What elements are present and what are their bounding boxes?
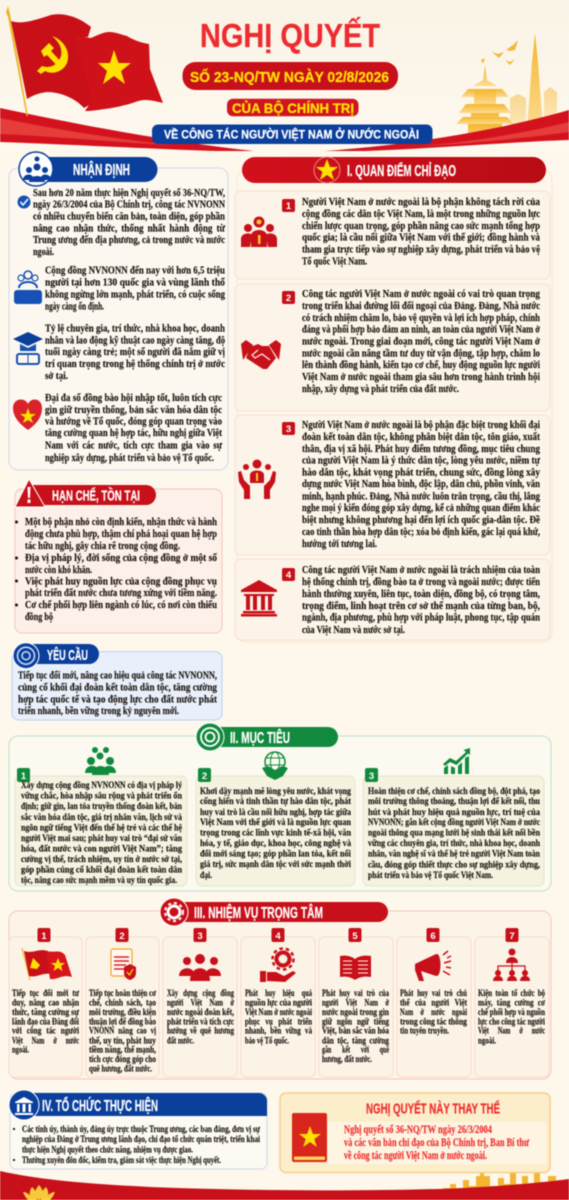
- badge: 2: [119, 931, 125, 942]
- text: thế, uy tín, phát huy: [89, 1035, 156, 1045]
- text: Khơi dậy mạnh mẽ lòng yêu nước, khát vọng: [200, 786, 351, 796]
- text: paragraph 4: và hướng về Tổ quốc, đóng góp quan trọng vào: [45, 416, 222, 428]
- text: vững các chuyên gia, trí thức, nhà khoa học, doanh: [368, 838, 540, 848]
- panel: section IV tổ chức thực hiện: [9, 1090, 267, 1169]
- text: thức, tăng cường sự: [12, 1007, 79, 1017]
- text: implementation: nghiệp của Đảng ở Trung ương lãnh đạo, chỉ đạo tổ chức quán triệt, triển khai: [22, 1134, 260, 1144]
- text: trong công tác thông: [400, 1016, 467, 1026]
- badge 3: [282, 422, 295, 435]
- text: Việt Nam ở nước ngoài: [245, 1007, 312, 1017]
- badge: [198, 768, 211, 782]
- text: paragraph 4: gìn giữ truyền thống, bản sắc văn hóa dân tộc: [45, 404, 222, 416]
- text: [21, 780, 182, 885]
- heading: NGHỊ QUYẾT NÀY THAY THẾ: [366, 1100, 500, 1118]
- issuer pill: CỦA BỘ CHÍNH TRỊ: [232, 101, 354, 116]
- badge 1: 1: [286, 201, 292, 212]
- badge 2: [282, 291, 295, 304]
- text: paragraph 1: Trung ương đến địa phương, cả trong nước và nước: [33, 234, 225, 246]
- icon: document shield: [111, 949, 136, 980]
- badge 1: [282, 199, 295, 212]
- heading: yêu cầu: YÊU CẦU: [47, 646, 88, 664]
- subject pill: [152, 124, 432, 144]
- text: paragraph 4: Nam với các nước, tích cực tham gia vào sự: [45, 440, 222, 452]
- text: cường vị thế, trách nhiệm, uy tín ở nước sở tại,: [21, 854, 182, 864]
- text: requirements: củng cố khối đại đoàn kết toàn dân tộc, tăng cường: [18, 682, 217, 694]
- text: ngoài.: [12, 1045, 29, 1055]
- text: tích cực đóng góp cho: [89, 1054, 156, 1064]
- text: paragraph 3: tuổi ngày càng trẻ; một số người đã nắm giữ vị: [45, 346, 225, 358]
- text: đổi mới sáng tạo; góp phần lan tỏa, kết nối: [200, 848, 351, 858]
- text: paragraph 4: nghiệp xây dựng, phát triển và bảo vệ Tổ quốc.: [45, 452, 214, 464]
- badge: 5: [352, 931, 358, 942]
- text: giá trị, sức mạnh dân tộc với sức mạnh thời: [200, 859, 351, 869]
- heading: hạn chế: [15, 479, 156, 507]
- skyline: [443, 1172, 566, 1197]
- text: viewpoint 2: [302, 288, 541, 395]
- panel: yêu cầu: [12, 643, 222, 720]
- text: paragraph 1: ngoài.: [33, 246, 54, 258]
- task card 2: [86, 928, 159, 1077]
- text: paragraph 3: [45, 322, 225, 382]
- text: viewpoint 4: của Việt Nam và nước sở tại.: [302, 624, 405, 636]
- icon: pagoda and skyline: [456, 33, 557, 144]
- text: replaced documents: về công tác người Việt Nam ở nước ngoài.: [344, 1150, 487, 1162]
- text: limitations: Một bộ phận nhỏ còn định kiến, nhận thức và hành: [25, 516, 217, 528]
- text: implementation: Các tỉnh ủy, thành ủy, đảng ủy trực thuộc Trung ương, các ban đảng, đơn vị sự: [22, 1124, 260, 1134]
- text: paragraph 2: ngày càng ổn định.: [45, 300, 104, 312]
- text: thuận lợi để đồng bào: [89, 1016, 156, 1026]
- text: Tiếp tục đổi mới tư: [12, 988, 79, 998]
- text: Nam ở nước ngoài: [400, 1007, 467, 1017]
- panel: nhận định: [9, 152, 228, 470]
- text: viewpoint 4: [302, 564, 540, 636]
- text: Phát huy vai trò chủ: [400, 988, 467, 998]
- right swoosh: [325, 110, 569, 151]
- text: Việt, bản sắc văn hóa: [322, 1026, 389, 1036]
- text: paragraph 3: Tỷ lệ chuyên gia, trí thức, nhà khoa học, doanh: [45, 322, 225, 334]
- icon: handshake: [241, 340, 281, 369]
- heading: section I: [242, 157, 546, 183]
- text: [245, 988, 312, 1045]
- icon: gear in hand: [260, 948, 296, 982]
- icon: org chart: [493, 948, 530, 981]
- icon: red book: [292, 1113, 327, 1162]
- text: hương, đất nước.: [322, 1054, 372, 1064]
- heading: section I: I. QUAN ĐIỂM CHỈ ĐẠO: [347, 162, 456, 180]
- text: ngoài thông qua mạng lưới hệ sinh thái kết nối bền: [368, 828, 540, 838]
- text: tiềm năng, thế mạnh,: [89, 1045, 156, 1055]
- text: tộc, nâng cao sức mạnh mềm và uy tín quốc gia.: [21, 875, 177, 885]
- text: paragraph 3: sở tại.: [45, 370, 68, 382]
- task card 5: [319, 928, 393, 1077]
- heading: section II: II. MỤC TIÊU: [230, 728, 290, 747]
- inner band: [328, 1122, 546, 1164]
- text: góp phần củng cố khối đại đoàn kết toàn dân: [21, 864, 182, 874]
- text: Việt Nam với thế giới và là nguồn lực quan: [200, 817, 351, 827]
- badge: 4: [275, 931, 281, 942]
- badge 2: 2: [286, 293, 291, 304]
- text: quê hương, đất nước.: [89, 1063, 152, 1073]
- text: đại.: [200, 870, 212, 880]
- heading: section II: [196, 723, 338, 751]
- heading: section IV: [9, 1090, 267, 1120]
- badge: 7: [509, 931, 515, 942]
- text: paragraph 1: ngày 26/3/2004 của Bộ Chính trị, công tác NVNONN: [33, 198, 225, 210]
- icon: flags: [22, 948, 72, 980]
- text: phát triển và bảo vệ Tổ quốc Việt Nam.: [368, 870, 493, 880]
- text: nhân, văn nghệ sĩ và thế hệ trẻ người Việt Nam toàn: [368, 848, 540, 858]
- text: hóa, y tế, giáo dục, khoa học, công nghệ và: [200, 838, 351, 848]
- text: Việt Nam ở nước: [12, 1035, 79, 1045]
- text: nguồn lực của người: [245, 997, 312, 1007]
- icon: lotus: [23, 1185, 55, 1200]
- text: duy, nâng cao nhận: [12, 997, 79, 1007]
- icon: megaphone: [415, 951, 451, 981]
- subject pill: VỀ CÔNG TÁC NGƯỜI VIỆT NAM Ở NƯỚC NGOÀI: [164, 126, 419, 142]
- footer wave: [0, 1171, 569, 1200]
- text: [322, 988, 390, 1064]
- text: limitations: [25, 516, 217, 623]
- text: [167, 988, 235, 1045]
- text: Hoàn thiện cơ chế, chính sách đồng bộ, đột phá, tạo: [368, 786, 540, 796]
- text: đất nước.: [167, 1035, 194, 1045]
- text: Xây dựng cộng đồng NVNONN có địa vị pháp lý: [21, 780, 182, 790]
- goal card 3: [363, 748, 544, 886]
- badge: 1: [21, 771, 27, 782]
- icon: flagpole: [6, 6, 28, 116]
- bullets: [15, 520, 18, 606]
- text: Tiếp tục hoàn thiện cơ: [89, 988, 157, 998]
- text: viewpoint 2: nhập, xây dựng và phát triển của đất nước.: [302, 383, 459, 395]
- text: implementation: thực hiện Nghị quyết theo chức năng, nhiệm vụ được giao.: [22, 1145, 193, 1155]
- text: implementation: Thường xuyên đôn đốc, kiểm tra, giám sát việc thực hiện Nghị quyết.: [22, 1155, 221, 1165]
- text: requirements: Tiếp tục đổi mới, nâng cao hiệu quả công tác NVNONN,: [18, 670, 217, 682]
- text: thể của người Việt: [400, 997, 468, 1007]
- text: môi trường, điều kiện: [89, 1007, 156, 1017]
- text: limitations: tác hữu nghị, gây chia rẽ trong cộng đồng.: [25, 540, 180, 552]
- text: phục vụ phát triển: [245, 1016, 312, 1026]
- text: [478, 988, 546, 1045]
- badge: [272, 928, 284, 942]
- heading: section IV: IV. TỔ CHỨC THỰC HIỆN: [42, 1097, 158, 1115]
- icon: growth chart: [443, 748, 470, 774]
- icon: birds: [481, 40, 518, 65]
- icon: people network: [85, 747, 116, 775]
- icon: check: [18, 196, 30, 208]
- icon: leader group: [241, 216, 277, 247]
- text: người Việt mai sau; phát huy vai trò “đại sứ văn: [21, 833, 182, 843]
- title: NGHỊ QUYẾT: [200, 17, 380, 54]
- badge: [348, 928, 362, 942]
- badge: [17, 768, 30, 782]
- heading: nhận định: [19, 152, 158, 186]
- icon: graduation book: [13, 332, 43, 364]
- text: ngoài.: [478, 1035, 496, 1045]
- card 1: [235, 191, 550, 279]
- badge: [116, 928, 128, 942]
- text: Xây dựng cộng đồng: [167, 988, 234, 998]
- icon: party flag: [11, 14, 94, 108]
- panel: section I quan điểm chỉ đạo: [235, 157, 552, 642]
- card 2: [235, 284, 550, 411]
- text: chế phối hợp và nguồn: [478, 1007, 545, 1017]
- text: sắc văn hóa dân tộc, giá trị nhân văn, lịch sử và: [21, 812, 182, 822]
- heading: section III: III. NHIỆM VỤ TRỌNG TÂM: [194, 903, 323, 922]
- badge: [38, 928, 50, 942]
- text: limitations: Việc phát huy nguồn lực của cộng đồng phục vụ: [25, 576, 217, 588]
- text: cầu, đóng góp thiết thực cho sự nghiệp xây dựng,: [368, 860, 540, 870]
- icon: open book: [340, 956, 371, 980]
- text: [400, 988, 468, 1036]
- icon: institution: [241, 580, 277, 616]
- text: limitations: Địa vị pháp lý, đời sống của cộng đồng ở một số: [25, 552, 217, 564]
- panel: section III nhiệm vụ trọng tâm: [9, 898, 551, 1079]
- text: limitations: Cơ chế phối hợp liên ngành có lúc, có nơi còn thiếu: [25, 599, 217, 611]
- text: phát triển và tích cực: [167, 1016, 234, 1026]
- text: paragraph 2: Cộng đồng NVNONN đến nay với hơn 6,5 triệu: [45, 264, 225, 276]
- text: Phát huy vai trò của: [322, 988, 389, 998]
- task card 3: [163, 928, 237, 1077]
- text: nước ngoài đoàn kết,: [167, 1007, 234, 1017]
- text: người Việt Nam ở: [322, 997, 390, 1007]
- heading: hạn chế: HẠN CHẾ, TỒN TẠI: [52, 486, 140, 504]
- text: lãnh đạo của Đảng đối: [12, 1016, 79, 1026]
- text: paragraph 2: không ngừng lớn mạnh, phát triển, có cuộc sống: [45, 288, 225, 300]
- text: requirements: hợp tác quốc tế và tạo động lực cho đất nước phát: [18, 694, 217, 706]
- text: paragraph 2: [45, 264, 225, 312]
- text: [89, 988, 157, 1073]
- text: viewpoint 3: hướng tới tương lai.: [302, 538, 377, 550]
- badge: 1: [41, 931, 47, 942]
- text: Phát huy hiệu quả: [245, 988, 312, 998]
- text: hướng về quê hương: [167, 1026, 234, 1036]
- badge: [506, 928, 518, 942]
- text: nước ngoài trong gìn: [322, 1007, 389, 1017]
- text: limitations: đồng bộ: [25, 611, 53, 623]
- badge 4: 4: [286, 570, 292, 581]
- text: requirements: [18, 670, 217, 717]
- badge 4: [282, 568, 295, 581]
- text: paragraph 4: Đại đa số đồng bào hội nhập tốt, luôn tích cực: [45, 392, 222, 404]
- panel: hạn chế, tồn tại: [15, 479, 222, 633]
- badge 3: 3: [286, 424, 291, 435]
- text: paragraph 1: Sau hơn 20 năm thực hiện Nghị quyết số 36-NQ/TW,: [33, 187, 225, 199]
- text: [200, 786, 352, 880]
- text: huy vai trò là cầu nối hữu nghị, hợp tác giữa: [200, 807, 351, 817]
- icon: heart with star: [13, 399, 42, 430]
- icon: vietnam flag: [74, 32, 163, 111]
- text: cống hiến và tinh thần tự hào dân tộc, phát: [200, 796, 352, 806]
- text: hóa, đất nước và con người Việt Nam”; tăng: [21, 844, 182, 854]
- panel: section II mục tiêu: [9, 723, 551, 891]
- text: paragraph 1: có nhiều chuyển biến căn bản, toàn diện, góp phần: [33, 210, 225, 222]
- goal card 1: [15, 747, 187, 886]
- text: paragraph 3: trí quan trọng trong hệ thống chính trị ở nước: [45, 358, 225, 370]
- text: máy, tăng cường cơ: [478, 997, 546, 1007]
- text: replaced documents: [344, 1124, 529, 1162]
- text: limitations: nước còn khó khăn.: [25, 564, 92, 576]
- text: paragraph 4: tăng cường quan hệ hợp tác, hữu nghị giữa Việt: [45, 427, 222, 439]
- text: định; giữ gìn, lan tỏa truyền thống đoàn kết, bản: [21, 801, 182, 811]
- badge: 3: [369, 771, 374, 782]
- card 4: [235, 559, 550, 640]
- badge: 2: [202, 771, 207, 782]
- task card 7: [475, 928, 549, 1077]
- text: limitations: động chưa phù hợp, thậm chí phá hoại quan hệ hợp: [25, 528, 217, 540]
- text: paragraph 1: [33, 187, 225, 258]
- text: replaced documents: Nghị quyết số 36-NQ/TW ngày 26/3/2004: [344, 1124, 492, 1136]
- text: paragraph 3: nhân và lao động kỹ thuật cao ngày càng tăng, độ: [45, 334, 225, 346]
- text: paragraph 2: người tại hơn 130 quốc gia và vùng lãnh thổ: [45, 276, 225, 288]
- badge: [365, 768, 378, 782]
- text: vững chắc, hòa nhập sâu rộng và phát triển ổn: [21, 790, 182, 800]
- card 3: [235, 415, 550, 555]
- text: trọng trong các lĩnh vực kinh tế-xã hội, văn: [200, 828, 351, 838]
- panel: nghị quyết này thay thế: [280, 1093, 550, 1172]
- goal card 2: [196, 752, 355, 886]
- text: hút và phát huy hiệu quả nguồn lực, trí tuệ của: [368, 807, 540, 817]
- text: requirements: triển nhanh, bền vững trong kỷ nguyên mới.: [18, 705, 179, 717]
- text: ngôn ngữ tiếng Việt đến thế hệ trẻ và các thế hệ: [21, 822, 182, 832]
- text: môi trường thông thoáng, thuận lợi để kết nối, thu: [368, 796, 540, 806]
- badge: 6: [430, 931, 436, 942]
- badge: 3: [197, 931, 203, 942]
- text: viewpoint 3: [302, 419, 540, 550]
- text: với công tác người: [12, 1026, 79, 1036]
- text: viewpoint 1: [302, 196, 540, 268]
- heading: yêu cầu: [13, 643, 99, 669]
- text: Kiện toàn tổ chức bộ: [478, 988, 545, 998]
- icon: people: [179, 954, 221, 981]
- text: dân tộc, tăng cường: [322, 1035, 389, 1045]
- heading: section III: [160, 898, 388, 926]
- text: paragraph 4: [45, 392, 222, 464]
- text: tin tuyên truyền.: [400, 1026, 449, 1036]
- text: viewpoint 1: Tổ quốc Việt Nam.: [302, 256, 367, 268]
- task card 1: [9, 928, 82, 1077]
- resolution number pill: [182, 62, 398, 90]
- bullets: [13, 1128, 15, 1161]
- resolution number pill: SỐ 23-NQ/TW NGÀY 02/8/2026: [190, 68, 389, 86]
- text: [368, 786, 540, 880]
- text: VNONN nâng cao vị: [89, 1026, 156, 1036]
- heading: nhận định: NHẬN ĐỊNH: [73, 161, 130, 179]
- text: người Việt Nam ở: [167, 997, 235, 1007]
- text: bảo vệ Tổ quốc.: [245, 1035, 289, 1045]
- text: gắn kết với quê: [322, 1045, 389, 1055]
- text: chế, chính sách, tạo: [89, 997, 156, 1007]
- badge: [194, 928, 206, 942]
- text: nhanh, bền vững và: [245, 1026, 312, 1036]
- icon: overseas community: [14, 271, 42, 304]
- text: lực cho công tác người: [478, 1016, 545, 1026]
- left swoosh: [0, 108, 254, 151]
- text: paragraph 1: nâng cao nhận thức, thống nhất hành động từ: [33, 222, 225, 234]
- text: [12, 988, 79, 1055]
- text: giữ ngôn ngữ tiếng: [322, 1016, 389, 1026]
- text: implementation: [22, 1124, 260, 1165]
- icon: hands holding people: [238, 460, 276, 499]
- task card 4: [241, 928, 315, 1077]
- header banner: [0, 0, 569, 151]
- text: limitations: phát triển đất nước chưa tương xứng với tiềm năng.: [25, 587, 217, 599]
- badge: [426, 928, 440, 942]
- task card 6: [397, 928, 471, 1077]
- icon: globe handshake: [262, 752, 288, 780]
